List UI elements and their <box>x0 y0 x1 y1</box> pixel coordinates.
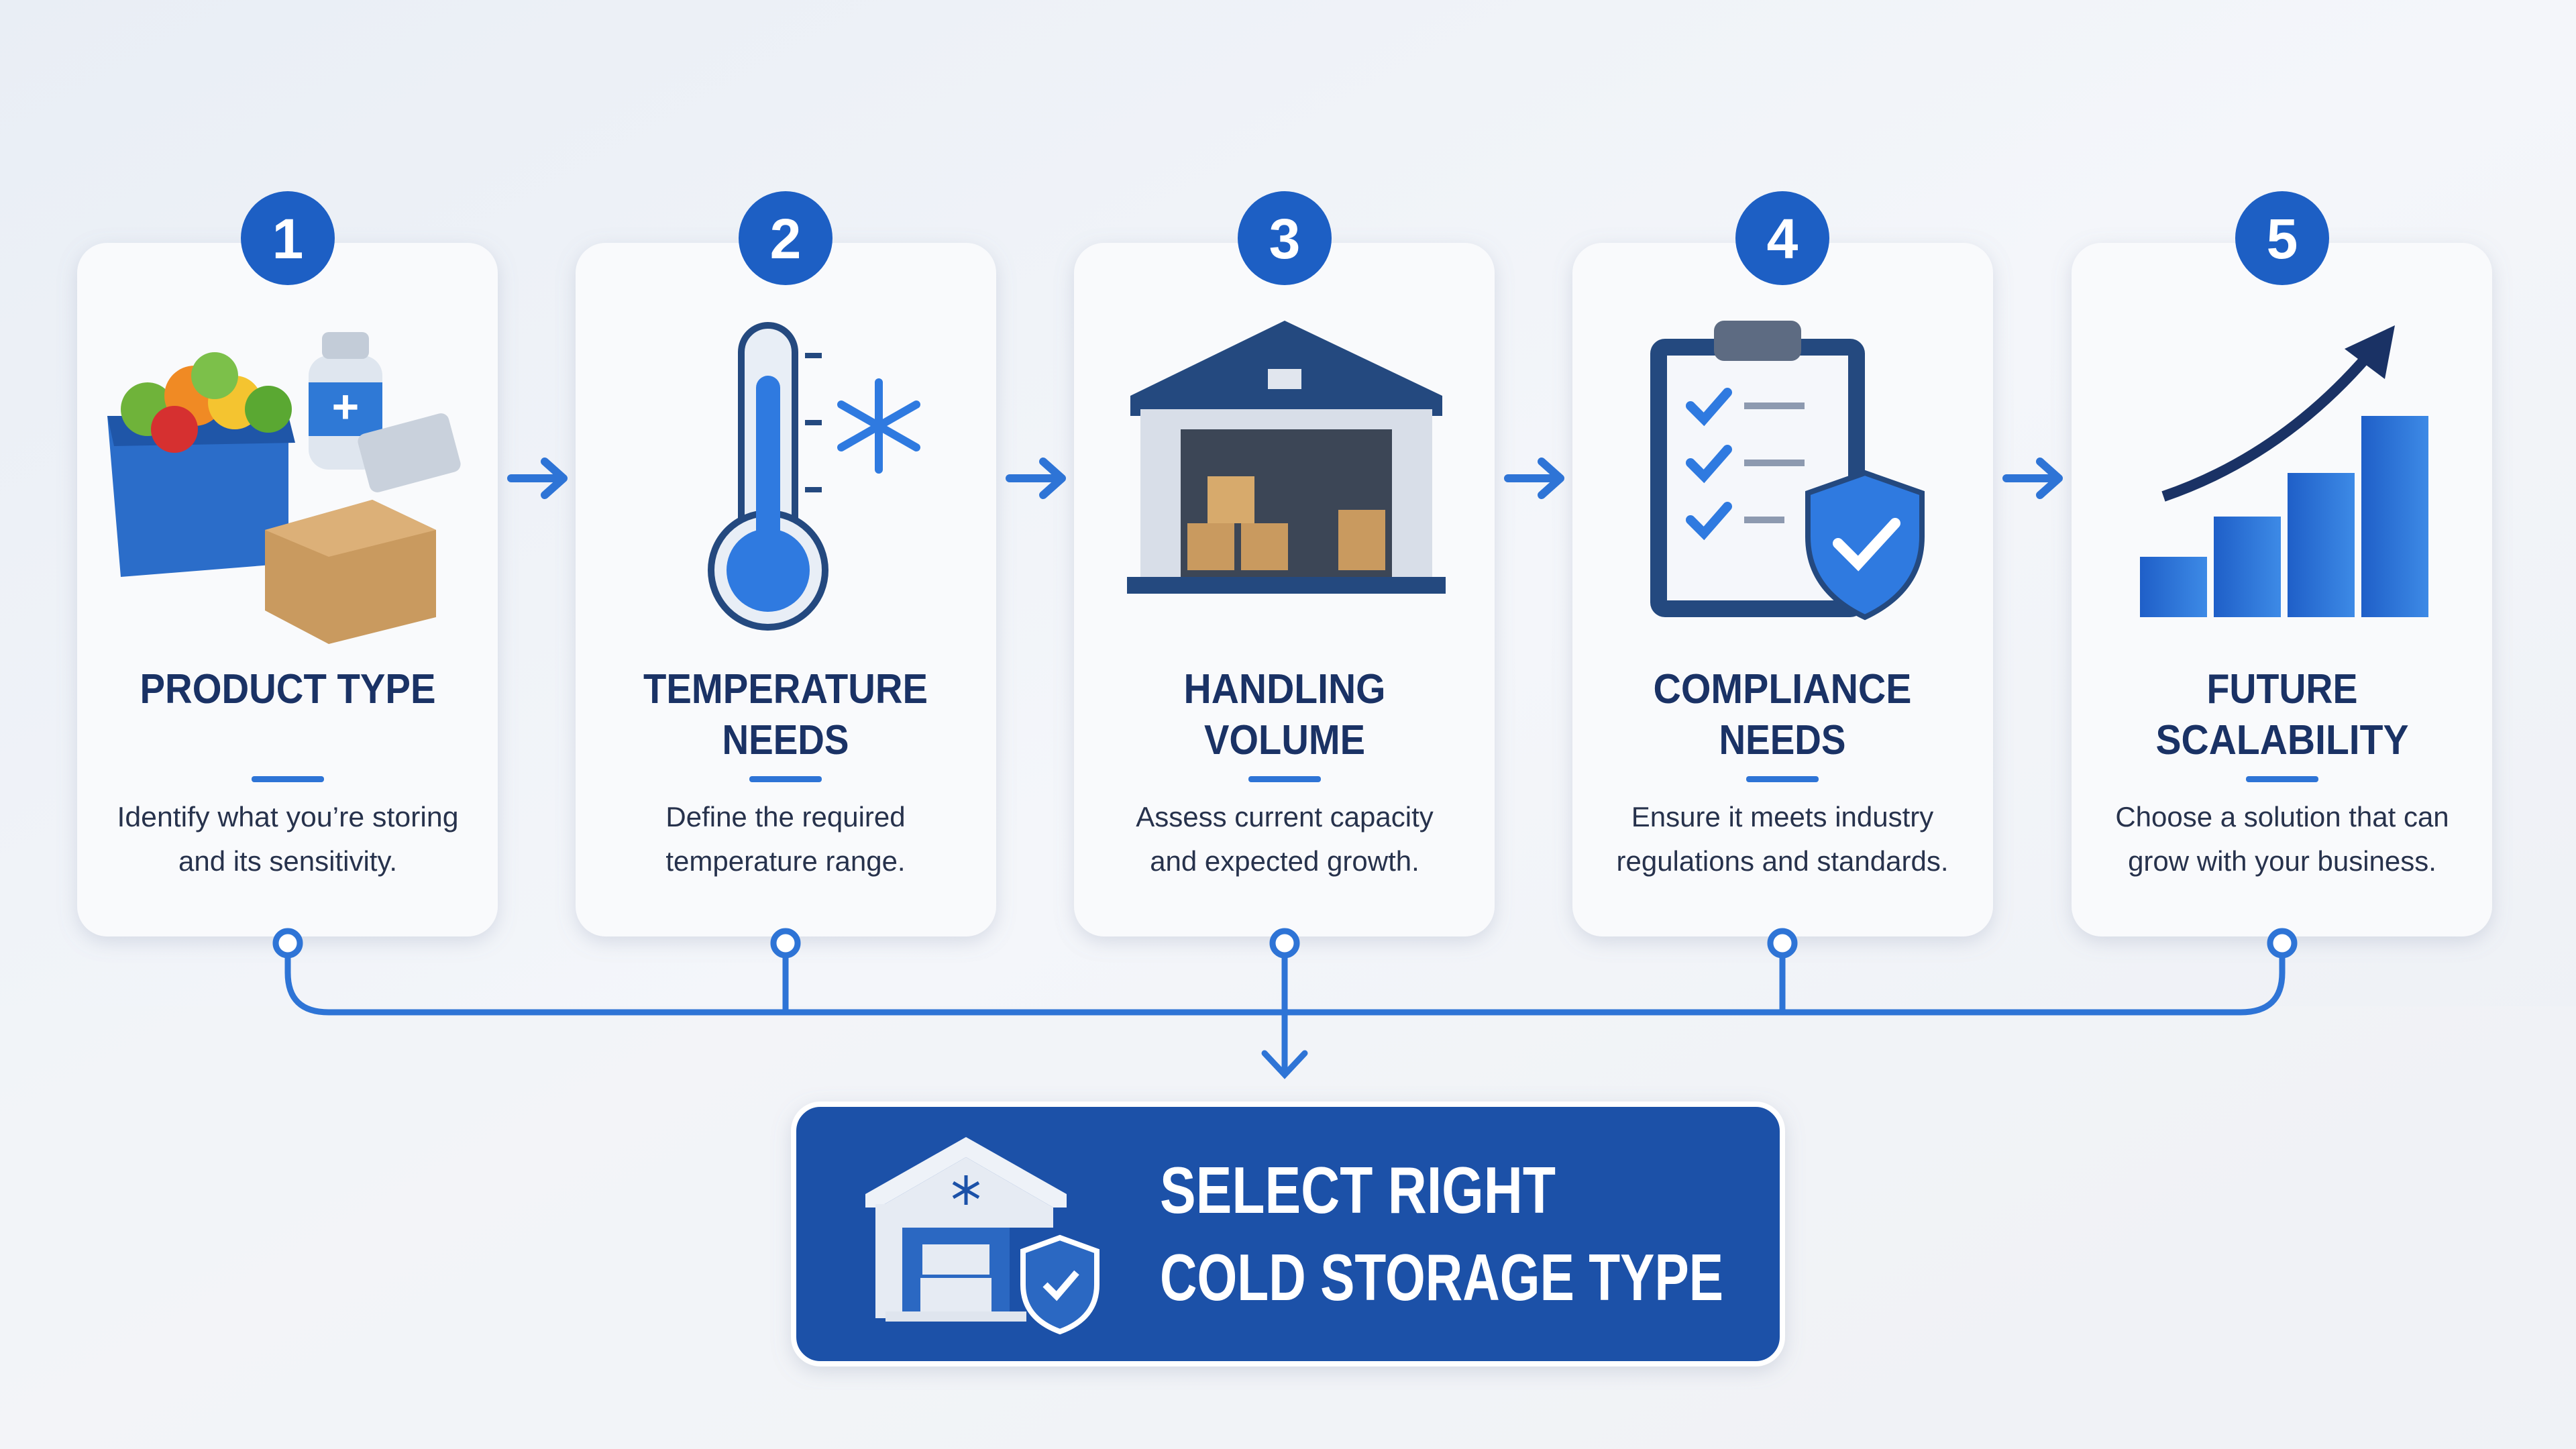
card 4: compliance needs: NEEDS <box>1719 717 1846 763</box>
card 1: product type <box>77 243 498 936</box>
result text: SELECT RIGHT <box>1160 1153 1556 1227</box>
icon: clipboard with shield <box>1650 321 1922 617</box>
card 5: future scalability <box>2072 243 2492 936</box>
card 3: handling volume: VOLUME <box>1204 717 1365 763</box>
description: Define the required <box>665 801 906 833</box>
title: FUTURE <box>2207 666 2357 712</box>
title: HANDLING <box>1183 666 1386 712</box>
number badges: 2 <box>770 207 801 270</box>
icon: cold storage building with shield <box>865 1137 1097 1332</box>
card 5: future scalability: grow with your business. <box>2128 845 2436 877</box>
connector lines <box>276 931 2294 1075</box>
number badges: 3 <box>1269 207 1300 270</box>
card 5: future scalability: SCALABILITY <box>2156 717 2408 763</box>
card 2: temperature needs <box>576 243 996 936</box>
card 4: compliance needs <box>1572 243 1993 936</box>
card 4: compliance needs: regulations and standards. <box>1617 845 1948 877</box>
description: Identify what you’re storing <box>117 801 459 833</box>
card 2: temperature needs: NEEDS <box>722 717 849 763</box>
title: COMPLIANCE <box>1653 666 1912 712</box>
number badges: 5 <box>2267 207 2298 270</box>
card 1: product type: and its sensitivity. <box>178 845 397 877</box>
description: Ensure it meets industry <box>1631 801 1933 833</box>
icon: warehouse <box>1127 321 1446 594</box>
description: Choose a solution that can <box>2115 801 2449 833</box>
title: TEMPERATURE <box>643 666 928 712</box>
number badges <box>241 191 2329 285</box>
number badges: 4 <box>1767 207 1799 270</box>
icon: growth bars with arrow <box>2140 325 2428 617</box>
card 3: handling volume <box>1074 243 1495 936</box>
card 3: handling volume: and expected growth. <box>1150 845 1419 877</box>
icon: thermometer and snowflake <box>711 325 916 627</box>
title: PRODUCT TYPE <box>140 666 436 712</box>
arrows between cards <box>511 462 2059 495</box>
result box <box>794 1104 1782 1364</box>
icon: produce, medicine, box: + <box>332 380 359 433</box>
result box: COLD STORAGE TYPE <box>1160 1240 1723 1314</box>
number badges: 1 <box>272 207 303 270</box>
description: Assess current capacity <box>1136 801 1434 833</box>
icon: produce, medicine, box <box>107 332 462 644</box>
card 2: temperature needs: temperature range. <box>665 845 906 877</box>
